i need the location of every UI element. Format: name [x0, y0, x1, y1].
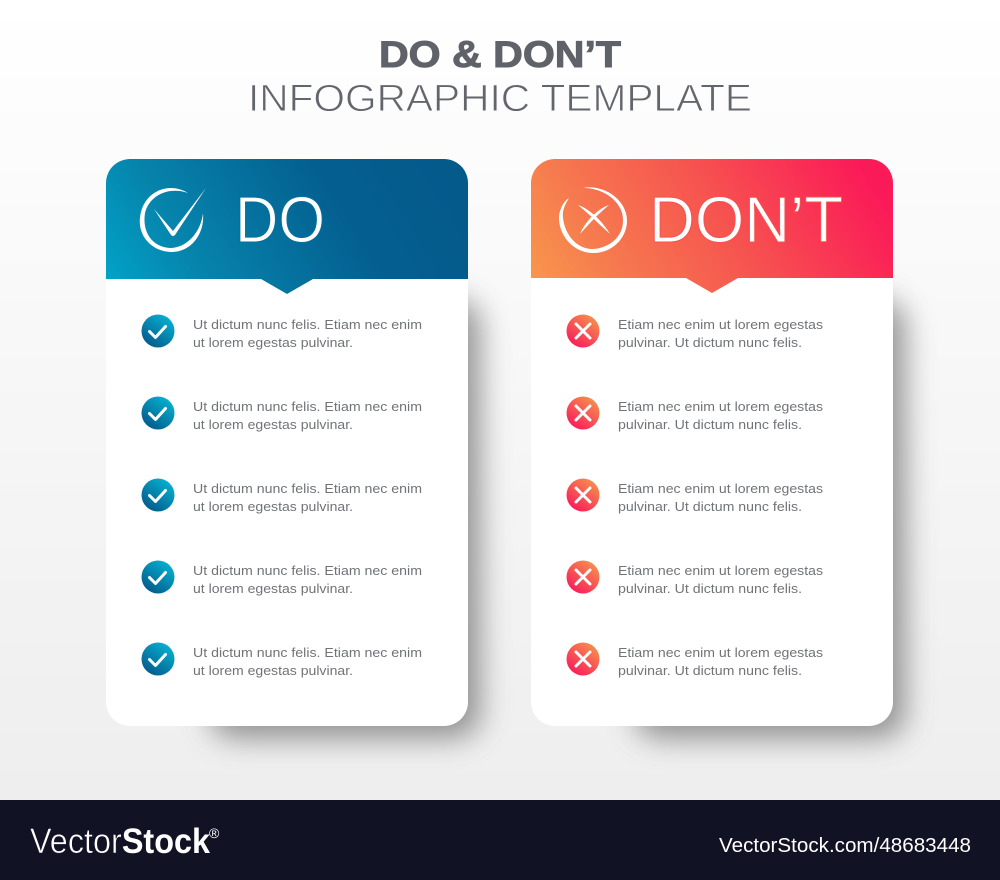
- row 2: Etiam nec enim ut lorem egestas: [618, 399, 824, 414]
- header band: [531, 159, 893, 293]
- row 2: [142, 396, 422, 432]
- row 3: [566, 478, 824, 514]
- card shadow: [635, 300, 905, 738]
- title: [248, 33, 752, 120]
- row 3: pulvinar. Ut dictum nunc felis.: [618, 499, 802, 514]
- row 4: [142, 560, 422, 596]
- row 3: Etiam nec enim ut lorem egestas: [618, 481, 824, 496]
- row 5: Etiam nec enim ut lorem egestas: [618, 645, 824, 660]
- title line 1: DO & DON’T: [379, 33, 621, 75]
- row 5: ut lorem egestas pulvinar.: [193, 663, 353, 678]
- panel: don't: [531, 159, 905, 738]
- row 4: pulvinar. Ut dictum nunc felis.: [618, 581, 802, 596]
- header band: [106, 159, 468, 294]
- row 2: ut lorem egestas pulvinar.: [193, 417, 353, 432]
- icon: hand-drawn x in circle: [559, 187, 627, 253]
- row 3: [142, 478, 422, 514]
- icon: hand-drawn check in circle: [140, 188, 206, 252]
- card shadow: [210, 300, 480, 738]
- title line 2: INFOGRAPHIC TEMPLATE: [248, 78, 752, 120]
- row 1: Ut dictum nunc felis. Etiam nec enim: [193, 317, 422, 332]
- card body: [531, 159, 893, 726]
- row 5: pulvinar. Ut dictum nunc felis.: [618, 663, 802, 678]
- image id: VectorStock.com/48683448: [719, 835, 971, 857]
- row 3: Ut dictum nunc felis. Etiam nec enim: [193, 481, 422, 496]
- row 5: Ut dictum nunc felis. Etiam nec enim: [193, 645, 422, 660]
- row 4: ut lorem egestas pulvinar.: [193, 581, 353, 596]
- row 4: Ut dictum nunc felis. Etiam nec enim: [193, 563, 422, 578]
- row 3: ut lorem egestas pulvinar.: [193, 499, 353, 514]
- card body: [106, 159, 468, 726]
- row 5: [142, 642, 422, 678]
- row 5: [566, 642, 824, 678]
- row 2: Ut dictum nunc felis. Etiam nec enim: [193, 399, 422, 414]
- row 1: ut lorem egestas pulvinar.: [193, 335, 353, 350]
- do heading: DO: [235, 183, 325, 256]
- registered mark: ®: [209, 825, 220, 841]
- row 1: [566, 314, 824, 350]
- don't heading: DON’T: [649, 183, 843, 256]
- logo: VectorStock: [30, 822, 210, 861]
- row 1: pulvinar. Ut dictum nunc felis.: [618, 335, 802, 350]
- footer bar: [0, 800, 1000, 880]
- row 1: Etiam nec enim ut lorem egestas: [618, 317, 824, 332]
- row 2: pulvinar. Ut dictum nunc felis.: [618, 417, 802, 432]
- row 1: [142, 314, 422, 350]
- panel: do: [106, 159, 480, 738]
- row 4: Etiam nec enim ut lorem egestas: [618, 563, 824, 578]
- row 2: [566, 396, 824, 432]
- row 4: [566, 560, 824, 596]
